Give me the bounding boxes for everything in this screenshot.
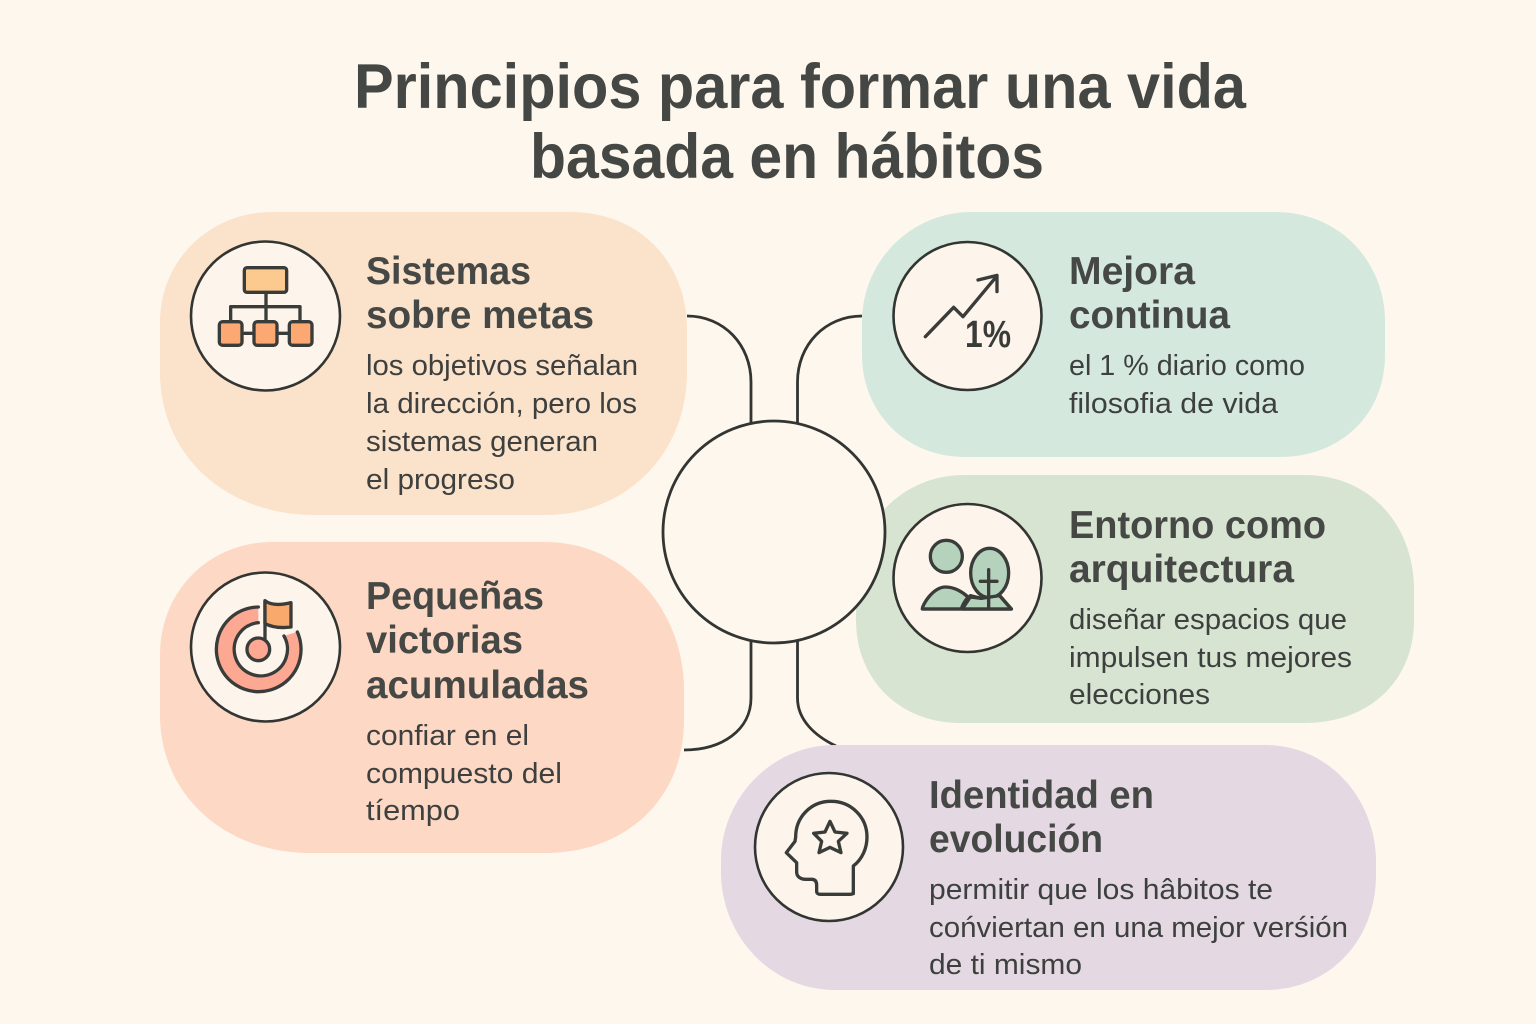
heading: Sistemas [366, 250, 531, 293]
body text: de ti mismo [929, 949, 1082, 981]
panel: sistemas sobre metas [160, 212, 687, 515]
heading: Entorno como [1069, 504, 1326, 547]
title: basada en hábitos [530, 122, 1044, 192]
body text [366, 350, 638, 496]
body text: impulsen tus mejores [1069, 642, 1352, 674]
heading: sobre metas [366, 294, 594, 337]
body text: diseñar espacios que [1069, 604, 1347, 636]
heading: Mejora [1069, 250, 1195, 293]
title: Principios para formar una vida [354, 52, 1247, 122]
body text [1069, 604, 1352, 711]
body text: compuesto del [366, 758, 562, 790]
heading: Pequeñas [366, 575, 544, 618]
heading [1069, 250, 1230, 337]
body text: filosofia de vida [1069, 388, 1279, 420]
heading: victorias [366, 619, 523, 662]
panel: identidad en evolución [721, 745, 1376, 990]
heading [1069, 504, 1326, 591]
body text [366, 720, 562, 827]
heading: acumuladas [366, 664, 589, 707]
body text: permitir que los hâbitos te [929, 874, 1273, 906]
body text: cońviertan en una mejor verśión [929, 912, 1348, 944]
body text: sistemas generan [366, 426, 598, 458]
icon: growth arrow 1% [894, 242, 1042, 390]
icon: head with star [755, 773, 903, 921]
connector lines [684, 316, 862, 750]
body text [929, 874, 1348, 981]
body text: el progreso [366, 464, 515, 496]
icon: person and tree [894, 504, 1042, 652]
central circle [663, 421, 885, 643]
heading: arquitectura [1069, 548, 1294, 591]
heading [366, 575, 589, 707]
panel: pequeñas victorias acumuladas [160, 542, 684, 853]
panel: mejora continua [862, 212, 1385, 457]
panel: entorno como arquitectura [856, 475, 1414, 723]
body text [1069, 350, 1305, 420]
heading: evolución [929, 818, 1103, 861]
title [354, 52, 1247, 192]
body text: elecciones [1069, 679, 1210, 711]
icon: hierarchy [191, 242, 340, 390]
heading [929, 774, 1154, 861]
icon: growth arrow 1%: 1% [965, 314, 1011, 356]
body text: tíempo [366, 795, 460, 827]
body text: el 1 % diario como [1069, 350, 1305, 382]
body text: la dirección, pero los [366, 388, 637, 420]
heading: continua [1069, 294, 1230, 337]
heading [366, 250, 594, 337]
body text: los objetivos señalan [366, 350, 638, 382]
icon: target with flag [191, 572, 340, 722]
body text: confiar en el [366, 720, 529, 752]
heading: Identidad en [929, 774, 1154, 817]
